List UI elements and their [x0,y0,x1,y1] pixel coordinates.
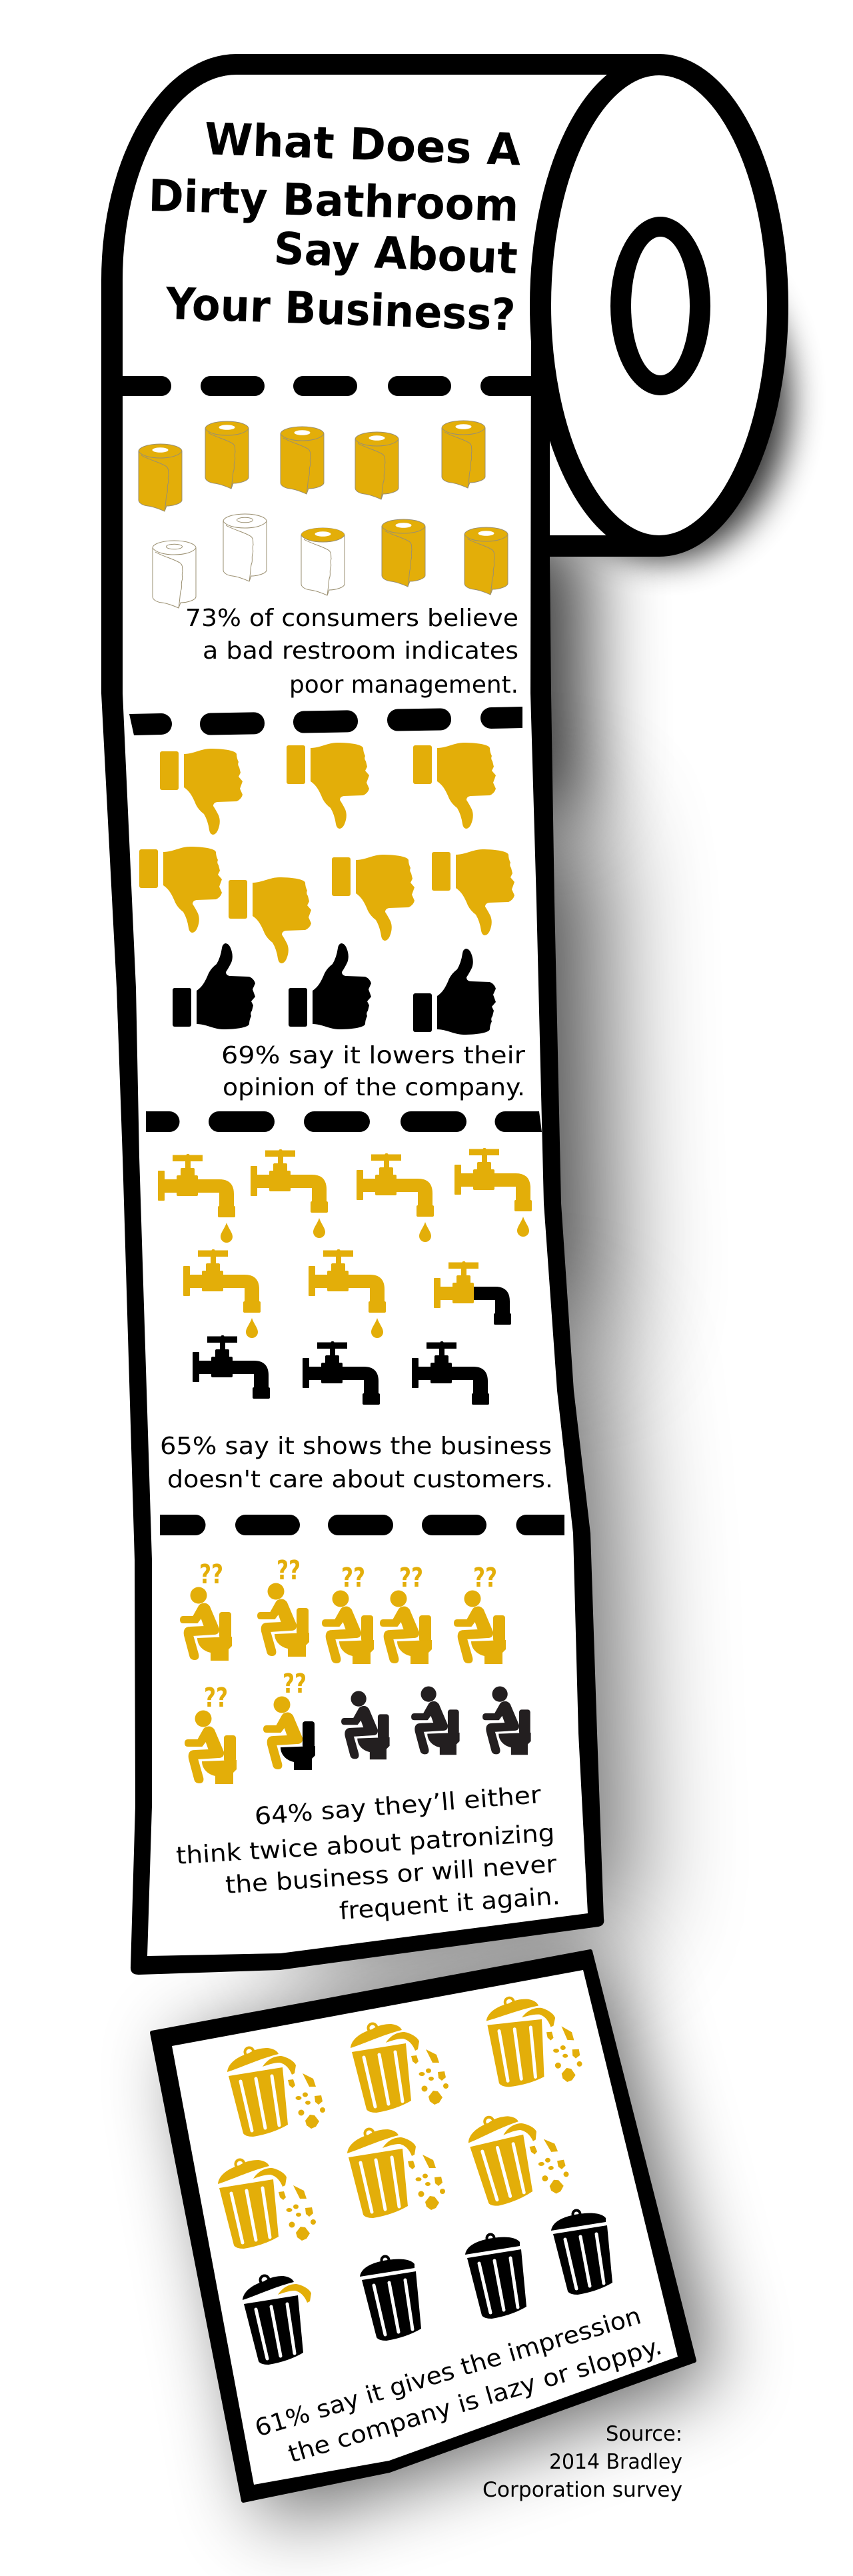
panel: toilet paper sheet outline [101,54,660,1975]
text: 61 percent: the company is lazy or sloppy. [285,2333,665,2469]
icon: thumbs up group [173,943,496,1035]
text: 65 percent [160,1433,553,1493]
panel: torn sheet outline [152,1951,694,2501]
text: 73 percent: 73% of consumers believe [185,605,518,632]
panel: gap below roll [550,427,663,535]
sheet shadow upper [267,527,590,813]
panel: sheet paper [123,75,610,1956]
text: 64 percent [175,1781,561,1925]
icon: confused people: ?? [473,1563,497,1593]
text: 73 percent: poor management. [289,671,518,699]
torn sheet drop shadow [180,1957,716,2523]
icon: confused people [181,1555,506,1784]
icon: black trash cans [360,2211,612,2341]
source note [482,2422,682,2502]
sheet shadow lower [300,1333,627,1967]
icon: dripping faucets [158,1148,532,1338]
title [148,113,522,341]
panel: people on toilets [181,1555,531,1784]
text: 69 percent: opinion of the company. [223,1074,525,1101]
icon: confused people: ?? [199,1559,223,1590]
icon: confused people: ?? [399,1563,423,1593]
perforation line 2 [129,707,522,735]
source note: 2014 Bradley [549,2450,682,2474]
icon: paper roll end [540,65,778,546]
source note: Corporation survey [482,2478,682,2502]
title: What Does A [203,113,522,176]
text: 73 percent [185,605,518,699]
text: 64 percent: the business or will never [225,1851,558,1899]
perforation line 4 [160,1515,564,1535]
roll drop shadow [536,240,790,560]
panel: trash cans [218,1997,612,2365]
icon: partly coloured person: ?? [283,1669,307,1699]
icon: partly overflowing trash can [243,2276,311,2365]
panel: toilet paper rolls [139,421,508,608]
title: Say About [273,223,518,284]
perforation line 3 [146,1111,542,1132]
text: 65 percent: 65% say it shows the business [160,1433,552,1460]
panel: thumbs icons [139,743,514,1035]
text: 65 percent: doesn't care about customers. [167,1466,553,1493]
text: 69 percent: 69% say it lowers their [221,1042,525,1069]
text: 69 percent [221,1042,525,1101]
icon: confused people: ?? [341,1563,365,1593]
icon: confused people: ?? [204,1683,228,1713]
icon: black faucets [193,1335,489,1405]
text: 64 percent: think twice about patronizing [175,1819,555,1870]
icon: overflowing trash cans [218,1997,585,2249]
title: Dirty Bathroom [148,170,519,232]
text: 64 percent: frequent it again. [339,1883,561,1925]
sheet shadow middle [267,813,610,1333]
text: 61 percent: 61% say it gives the impression [252,2302,644,2443]
icon: partly coloured faucet [434,1261,511,1325]
perforation line 1 [123,376,531,396]
icon: thumbs down group [139,743,514,963]
icon: confused people: ?? [277,1555,301,1586]
text: 73 percent: a bad restroom indicates [203,637,518,665]
source note: Source: [606,2422,682,2446]
panel: torn sheet paper [172,1970,678,2485]
title: Your Business? [165,278,516,341]
icon: black people [342,1687,531,1759]
text: 64 percent: 64% say they’ll either [254,1781,542,1831]
panel: faucet icons [158,1148,532,1405]
icon: partly coloured person [264,1669,315,1770]
